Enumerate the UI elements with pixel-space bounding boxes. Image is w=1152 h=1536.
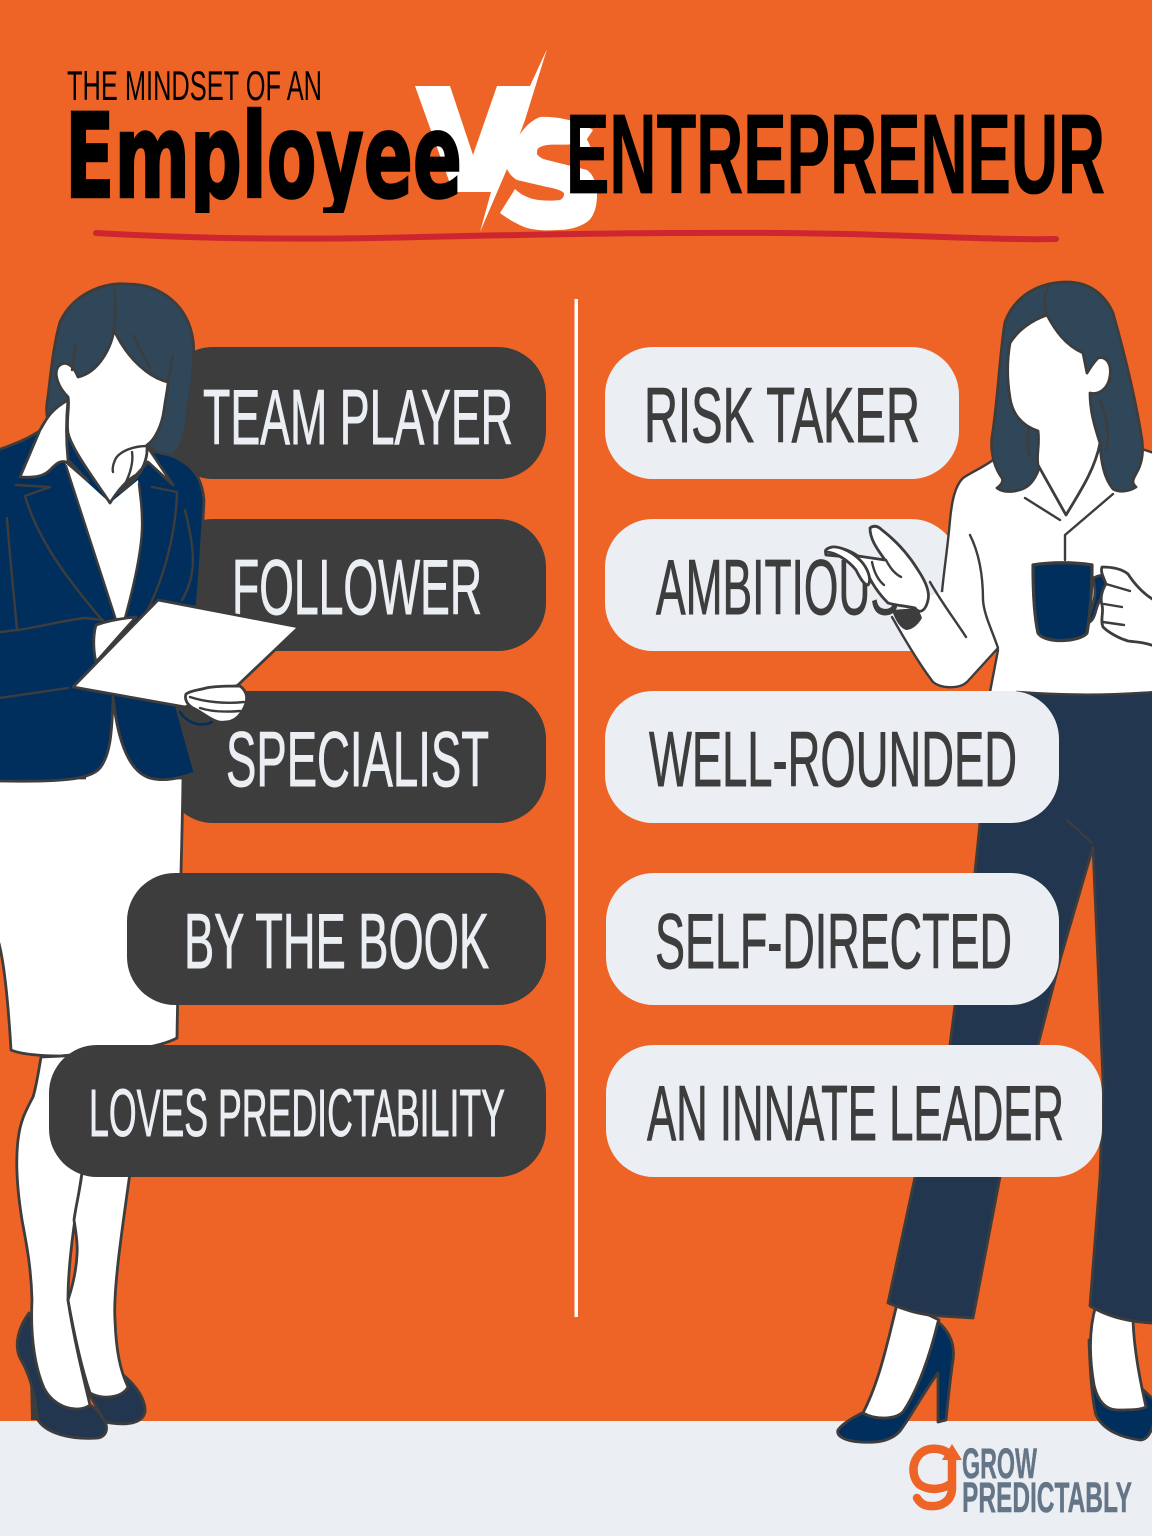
logo: grow predictably [913, 1440, 1132, 1522]
pointing hand [825, 526, 929, 611]
pill: team player: TEAM PLAYER [203, 373, 513, 461]
shirt collar lines [1025, 494, 1113, 560]
hair strands [72, 290, 173, 382]
left shoe [838, 1322, 953, 1442]
gap between legs [67, 1218, 78, 1300]
pill: risk taker: RISK TAKER [644, 371, 920, 459]
clipboard paper [73, 600, 299, 707]
title: kicker: THE MINDSET OF AN [67, 62, 322, 109]
collar right [120, 446, 173, 493]
pill: follower [165, 519, 546, 651]
shirt outline [942, 449, 1152, 695]
blouse [65, 462, 142, 618]
pill: ambitious: AMBITIOUS [656, 543, 900, 631]
jacket seams [0, 485, 193, 698]
title: VS mark: S [510, 99, 592, 256]
title: VS mark: V [427, 58, 519, 221]
sleeve outline [892, 535, 998, 687]
hair [992, 282, 1143, 491]
logo icon [913, 1444, 962, 1506]
pill: team player [165, 347, 546, 479]
pill: an innate leader [606, 1045, 1102, 1177]
pill: risk taker [605, 347, 959, 479]
collar details [113, 446, 147, 493]
pill: follower: FOLLOWER [232, 543, 482, 631]
shirt [942, 440, 1152, 694]
employee figure: skirt [0, 778, 183, 1056]
title underline [96, 233, 1056, 239]
pill: ambitious [605, 519, 959, 651]
footer band [0, 1421, 1152, 1536]
pill: specialist: SPECIALIST [226, 715, 489, 803]
hair [47, 284, 194, 456]
entrepreneur figure: legs and trousers [838, 692, 1152, 1442]
right shoe [1089, 1340, 1152, 1440]
hand holding paper [180, 686, 247, 724]
hair part and strands [1027, 285, 1108, 456]
jacket [0, 428, 204, 781]
left cuff [94, 617, 136, 662]
logo wordmark: GROW [962, 1440, 1037, 1488]
pill: loves predictability [49, 1045, 546, 1177]
collar left [20, 400, 88, 481]
black cuff [892, 608, 922, 630]
mug hand [1101, 567, 1152, 646]
sleeve [892, 592, 998, 687]
pill: specialist [165, 691, 546, 823]
left leg [863, 1300, 939, 1418]
trouser seam [1067, 820, 1092, 843]
left shoe heel [30, 1372, 38, 1420]
pill: by the book: BY THE BOOK [184, 897, 489, 985]
left shoe [17, 1313, 106, 1438]
face and neck [56, 330, 168, 503]
title: VS mark [415, 49, 597, 256]
title [65, 49, 1105, 256]
centre divider [574, 299, 578, 1317]
employee figure: legs and shoes [17, 1055, 145, 1438]
pill: loves predictability: LOVES PREDICTABILITY [89, 1076, 505, 1151]
right leg [1090, 1305, 1146, 1410]
pill: well-rounded [605, 691, 1059, 823]
right shoe [88, 1375, 145, 1424]
face and neck [1008, 315, 1110, 515]
right leg [68, 1173, 130, 1397]
coffee mug [1033, 563, 1120, 641]
blouse under jacket hem [85, 690, 155, 785]
pill: self-directed [606, 873, 1059, 1005]
entrepreneur figure: upper body [825, 282, 1152, 695]
left leg [17, 1055, 90, 1409]
trousers [888, 692, 1152, 1323]
employee figure: upper body [0, 284, 299, 785]
title: employee: Employee [65, 88, 462, 225]
pill: by the book [127, 873, 546, 1005]
